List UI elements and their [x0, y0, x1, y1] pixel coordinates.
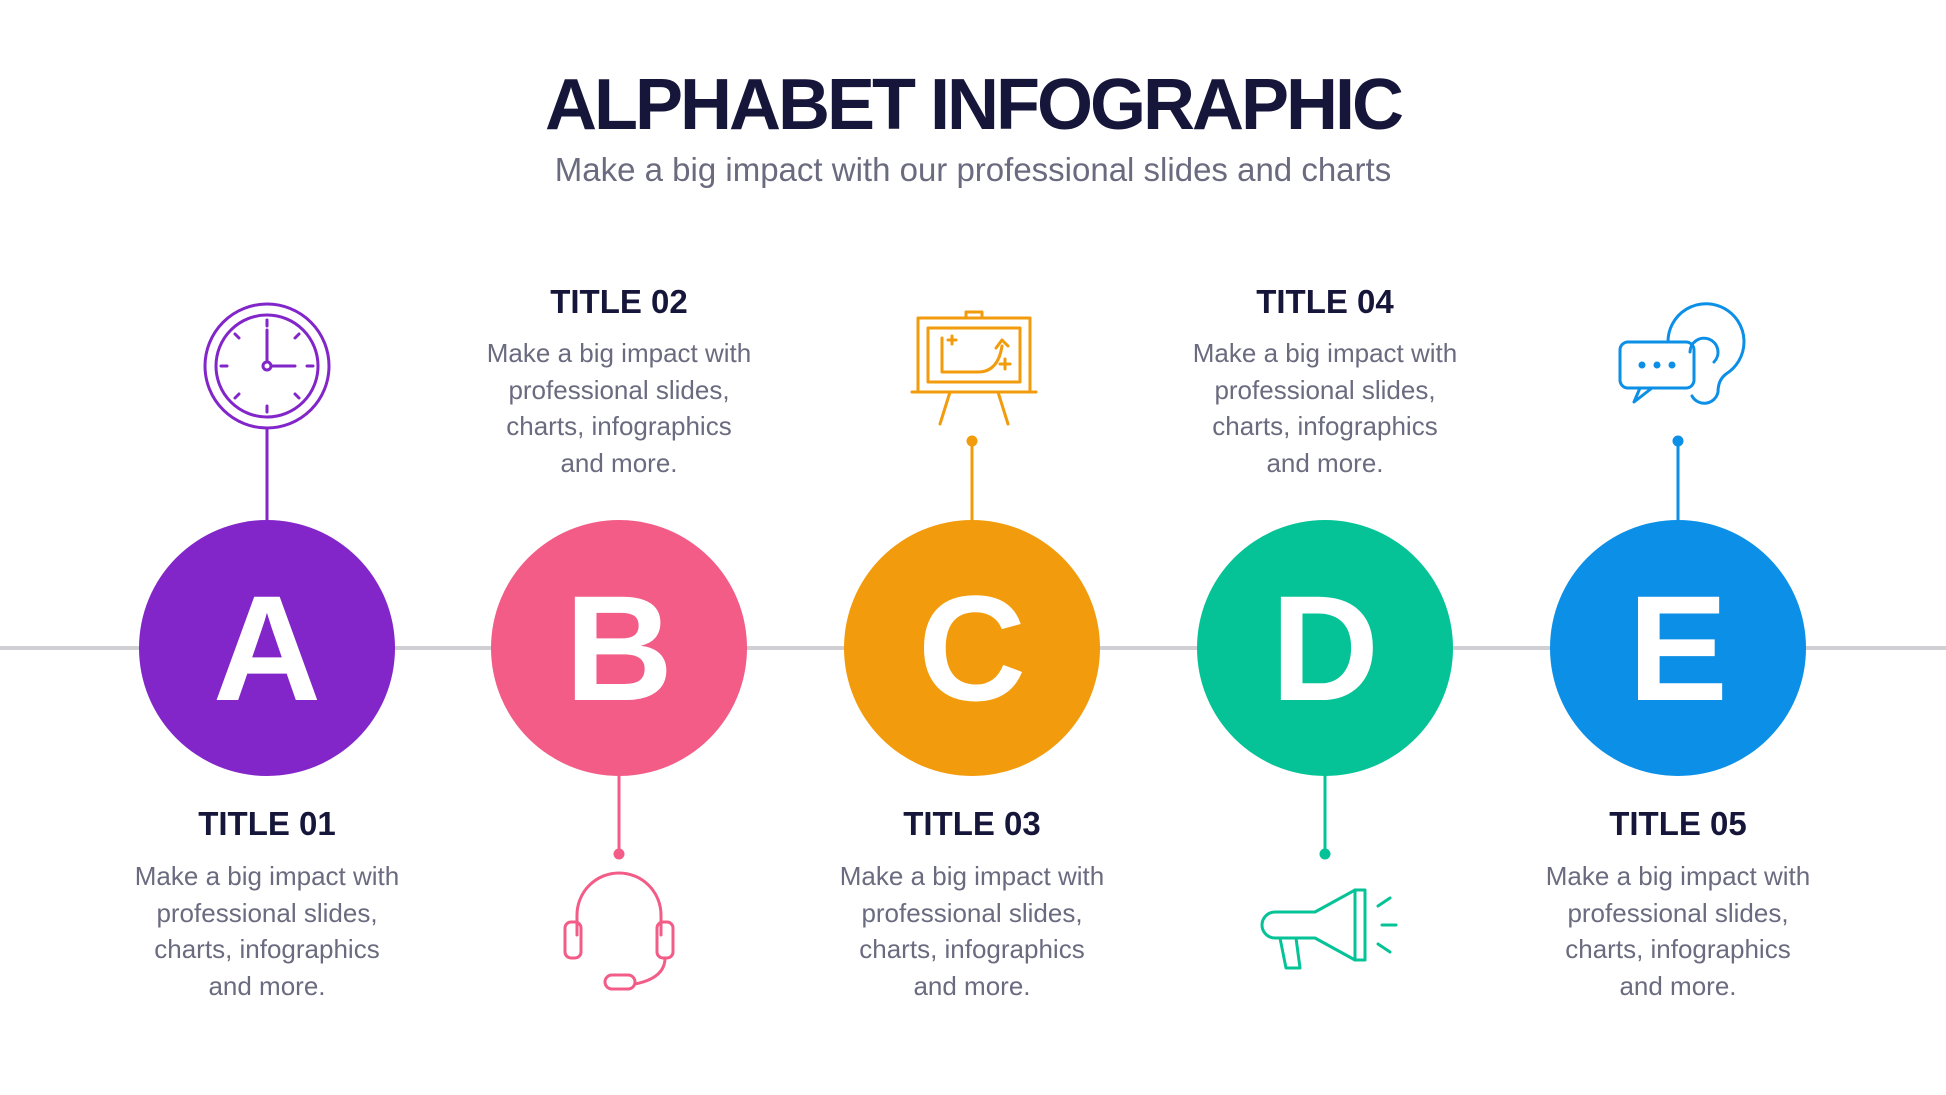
circle E — [1550, 520, 1806, 776]
text 05: Make a big impact with — [1546, 861, 1810, 891]
text 04: and more. — [1266, 448, 1384, 478]
text 04: charts, infographics — [1212, 411, 1438, 441]
text 03: charts, infographics — [859, 934, 1085, 964]
text 02: charts, infographics — [506, 411, 732, 441]
circle C: C — [918, 564, 1026, 732]
title 03: TITLE 03 — [903, 805, 1041, 842]
text 02 — [487, 338, 751, 478]
text 05: professional slides, — [1567, 898, 1789, 928]
text 02: professional slides, — [508, 374, 730, 404]
text 05: charts, infographics — [1565, 934, 1791, 964]
title 01: TITLE 01 — [198, 805, 336, 842]
text 04: professional slides, — [1214, 374, 1436, 404]
circle D — [1197, 520, 1453, 776]
circle A: A — [213, 564, 321, 732]
icon: clock — [205, 304, 329, 521]
text 02: and more. — [560, 448, 678, 478]
subtitle: Make a big impact with our professional slides and charts — [555, 151, 1391, 188]
icon: megaphone — [1262, 776, 1396, 968]
text 04 — [1193, 338, 1457, 478]
circle E: E — [1628, 564, 1728, 732]
text 01: Make a big impact with — [135, 861, 399, 891]
text 01: charts, infographics — [154, 934, 380, 964]
text 03: professional slides, — [861, 898, 1083, 928]
text 03 — [840, 861, 1104, 1000]
title 04: TITLE 04 — [1256, 283, 1394, 320]
text 05 — [1546, 861, 1810, 1000]
text 01: professional slides, — [156, 898, 378, 928]
text 05: and more. — [1619, 970, 1737, 1000]
circle B — [491, 520, 747, 776]
text 03: Make a big impact with — [840, 861, 1104, 891]
circle C — [844, 520, 1100, 776]
circle B: B — [565, 564, 673, 732]
circle D: D — [1271, 564, 1379, 732]
icon: presentation board — [912, 312, 1036, 521]
title 02: TITLE 02 — [550, 283, 688, 320]
title: ALPHABET INFOGRAPHIC — [545, 65, 1401, 145]
timeline line — [0, 646, 1946, 650]
text 04: Make a big impact with — [1193, 338, 1457, 368]
icon: chat ear — [1620, 304, 1744, 521]
title 05: TITLE 05 — [1609, 805, 1747, 842]
text 01 — [135, 861, 399, 1000]
text 02: Make a big impact with — [487, 338, 751, 368]
text 03: and more. — [913, 970, 1031, 1000]
text 01: and more. — [208, 970, 326, 1000]
icon: headset — [565, 776, 673, 989]
circle A — [139, 520, 395, 776]
